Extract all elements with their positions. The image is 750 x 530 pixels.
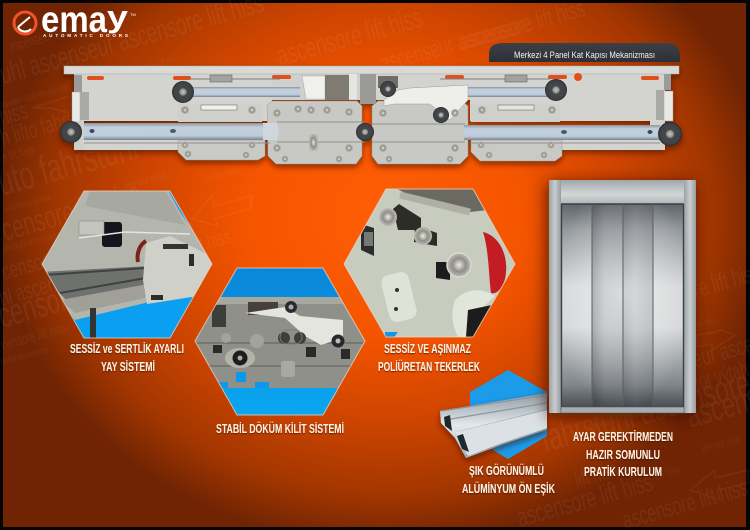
heading pill: Merkezi 4 Panel Kat Kapısı Mekanizması [514, 50, 655, 61]
left back plate [74, 74, 360, 150]
bolts [181, 105, 556, 162]
watermark text pattern: censore lift hiss [0, 319, 69, 353]
watermark text pattern: elevator výtah [122, 169, 168, 192]
caption: installation [573, 429, 673, 479]
trademark: TM [130, 12, 136, 17]
logo tagline: AUTOMATIC DOORS [43, 33, 128, 38]
watermark text pattern: ascensore lift hiss [4, 192, 52, 214]
centre lock cam [360, 74, 468, 120]
watermark text pattern: ascenseur ascensore lift hiss [103, 54, 178, 84]
door lintel [561, 180, 684, 204]
logo: emay automatic doors [14, 0, 136, 40]
right bracket [656, 74, 673, 121]
centre right door hanger plate [372, 101, 468, 164]
caption: spring system: YAY SİSTEMİ [101, 359, 155, 374]
logo wordmark: ema [41, 0, 107, 40]
watermark text pattern: ascenseur ascensore lift hiss [7, 6, 131, 55]
hexagon: aluminium threshold backdrop [470, 370, 547, 459]
watermark text pattern: censore [0, 246, 59, 286]
orange slots [87, 73, 659, 81]
door panels [561, 204, 684, 409]
caption: polyurethane wheels: POLİÜRETAN TEKERLEK [378, 359, 480, 374]
lock contact block [302, 74, 357, 100]
watermark text pattern: ahrstuhl ascenseur [0, 228, 62, 255]
wheels [60, 79, 682, 146]
caption: installation: HAZIR SOMUNLU [586, 448, 660, 462]
door mechanism [60, 66, 682, 164]
caption: aluminium threshold [462, 463, 555, 496]
caption: installation: PRATİK KURULUM [584, 464, 662, 479]
caption: polyurethane wheels [378, 341, 480, 374]
caption: polyurethane wheels: SESSİZ VE AŞINMAZ [384, 341, 471, 356]
watermark text pattern: e lift hiss [0, 143, 36, 165]
elevator door [549, 180, 696, 413]
heading pill [489, 43, 680, 62]
caption: aluminium threshold: ŞIK GÖRÜNÜMLÜ [469, 463, 544, 478]
caption: installation: AYAR GEREKTİRMEDEN [573, 429, 673, 444]
hexagon photo: lock system [190, 268, 370, 415]
watermark text pattern: lift hiss [653, 463, 682, 483]
aluminium threshold profile [440, 393, 547, 458]
left bracket [72, 75, 89, 122]
watermark text pattern: elevator výtah lifto fahrstuhl [587, 396, 682, 433]
left door hanger plate [178, 104, 265, 160]
watermark text pattern: lift hiss [572, 456, 620, 492]
watermark text pattern: nseur ascensore [0, 343, 49, 367]
watermark text pattern: ascenseur ascensore [377, 10, 533, 78]
watermark text pattern: ascensore lift hiss [273, 2, 426, 73]
hexagon photo: spring system [40, 190, 215, 340]
watermark text pattern: fahrstuhl ascensore [536, 361, 750, 460]
watermark text pattern: lift hiss [696, 315, 716, 330]
watermark text pattern: elevator výtah [202, 164, 240, 184]
upper rails [186, 75, 555, 97]
caption: spring system: SESSİZ ve SERTLİK AYARLI [70, 341, 184, 356]
right back plate [372, 74, 665, 150]
door sill [561, 407, 684, 413]
watermark text pattern: elevator výtah lifto fahrstuhl [0, 81, 71, 110]
logo ring icon [14, 12, 36, 34]
watermark text pattern: h lifto fahrstuhl [0, 99, 102, 152]
watermark text pattern: elevator výtah [700, 432, 743, 454]
caption: aluminium threshold: ALÜMİNYUM ÖN EŞİK [462, 481, 555, 496]
watermark text pattern: tor výtah [692, 356, 750, 395]
door frame jambs [549, 180, 696, 413]
caption: spring system [70, 341, 184, 374]
lower rails [84, 122, 660, 143]
top bar [64, 66, 679, 74]
centre left door hanger plate [267, 101, 362, 164]
watermark text pattern: ft hiss [193, 224, 234, 257]
hexagon photo: polyurethane wheel [344, 185, 520, 340]
right door hanger plate [471, 104, 562, 161]
logo wordmark: y [107, 0, 129, 34]
watermark text pattern: censore lift hiss [0, 175, 145, 248]
caption: lock system: STABİL DÖKÜM KİLİT SİSTEMİ [216, 421, 344, 436]
